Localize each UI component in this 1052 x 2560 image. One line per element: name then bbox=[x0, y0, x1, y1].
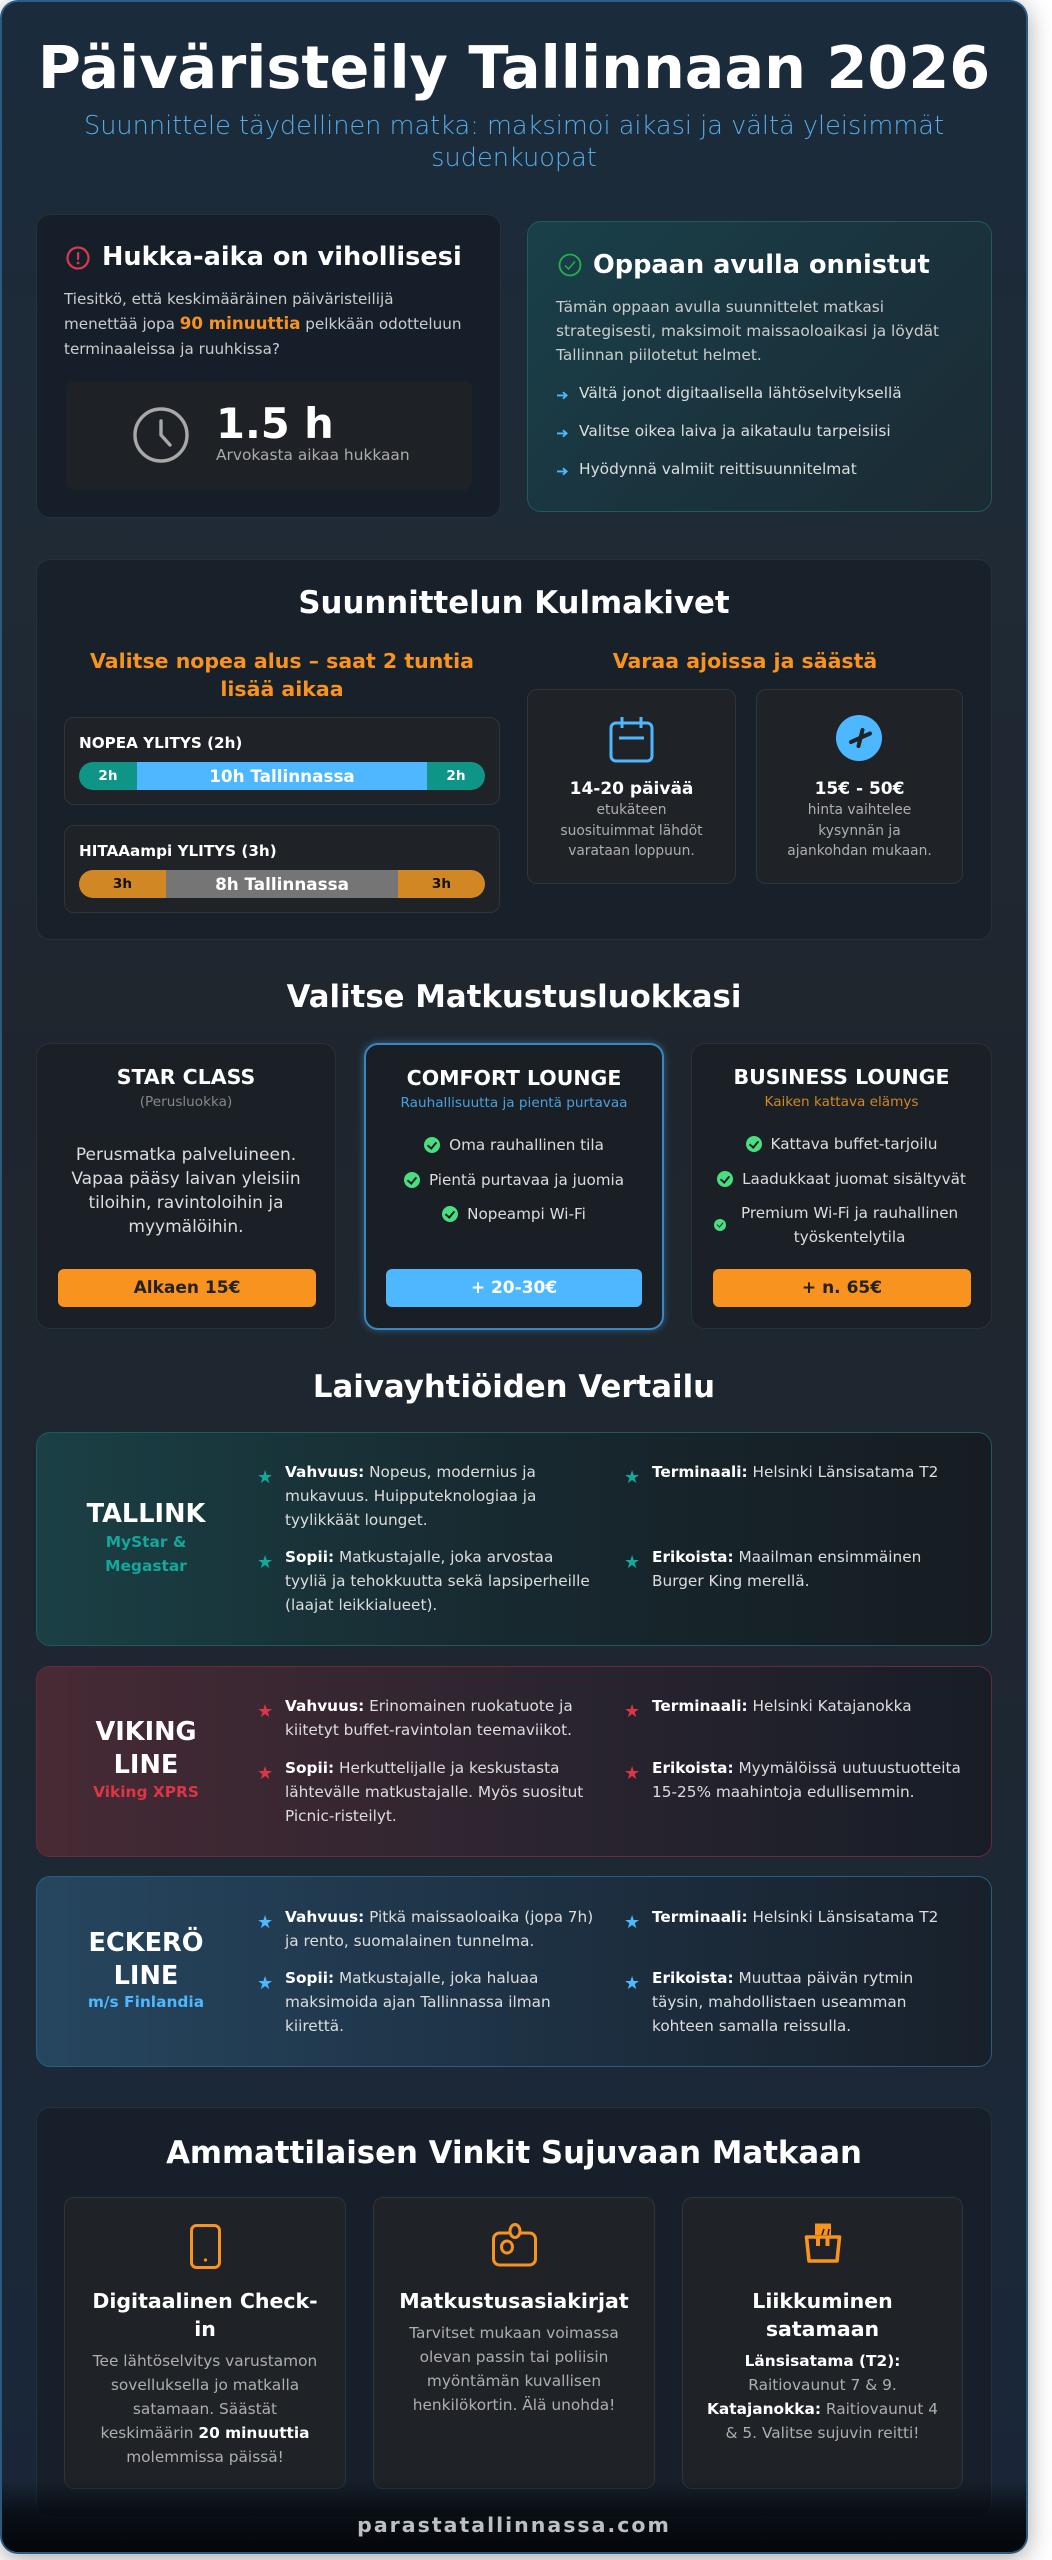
price button bbox=[713, 1269, 971, 1307]
stat box bbox=[66, 381, 472, 490]
special: Eckerö: täysin, mahdollistaen useamman bbox=[652, 1993, 906, 2011]
description bbox=[683, 2349, 962, 2445]
card: travel documents bbox=[373, 2197, 655, 2489]
star: ★ bbox=[257, 1701, 273, 1722]
card: booking time bbox=[527, 689, 736, 884]
price button: Alkaen 15€ bbox=[134, 1278, 240, 1298]
body text: Tiesitkö, että keskimääräinen päiväristeilijä bbox=[64, 290, 394, 308]
title: Matkustusasiakirjat bbox=[399, 2289, 629, 2313]
icon: check bbox=[558, 254, 582, 276]
icon: arrow bbox=[557, 430, 568, 438]
strength: Tallink: mukavuus. Huipputeknologiaa ja bbox=[285, 1487, 536, 1505]
title bbox=[65, 2288, 345, 2343]
ships: Viking Line: Viking XPRS bbox=[93, 1783, 199, 1801]
ships: Eckerö Line: m/s Finlandia bbox=[88, 1993, 204, 2011]
heading: Hukka-aika on vihollisesi bbox=[102, 242, 462, 272]
special: Eckerö: Erikoista: Muuttaa päivän rytmin bbox=[652, 1969, 913, 1987]
suited for: Viking: lähtevälle matkustajalle. Myös suositut bbox=[285, 1783, 583, 1801]
description: hinta vaihtelee bbox=[808, 802, 911, 818]
brand: Viking Line bbox=[95, 1717, 197, 1780]
icon: alert bbox=[66, 246, 90, 270]
class name: COMFORT LOUNGE bbox=[407, 1066, 621, 1090]
description: molemmissa päissä! bbox=[126, 2448, 284, 2466]
card: fast crossing bbox=[64, 717, 500, 805]
feature 2: Pientä purtavaa ja juomia bbox=[429, 1171, 624, 1189]
ships: Tallink: MyStar & bbox=[106, 1533, 186, 1551]
body text: strategisesti, maksimoit maissaoloaikasi ja löydät bbox=[556, 322, 939, 340]
star: ★ bbox=[624, 1552, 640, 1573]
description bbox=[71, 1145, 301, 1237]
special: Viking: Erikoista: Myymälöissä uutuustuotteita bbox=[652, 1759, 961, 1777]
strength: Eckerö: ja rento, suomalainen tunnelma. bbox=[285, 1932, 534, 1950]
description: keskimäärin 20 minuuttia bbox=[100, 2424, 310, 2442]
brand: Viking Line: VIKING bbox=[95, 1717, 197, 1747]
panel: wasted time bbox=[36, 214, 501, 518]
strength: Viking: Vahvuus: Erinomainen ruokatuote ja bbox=[285, 1697, 573, 1715]
class tagline: Rauhallisuutta ja pientä purtavaa bbox=[400, 1095, 628, 1111]
label: fast crossing: NOPEA YLITYS (2h) bbox=[79, 734, 242, 752]
description bbox=[65, 2349, 345, 2469]
card: star class bbox=[36, 1043, 336, 1329]
star: ★ bbox=[257, 1973, 273, 1994]
price button: + n. 65€ bbox=[802, 1278, 882, 1298]
brand: Eckerö Line: ECKERÖ bbox=[88, 1928, 204, 1958]
panel: planning cornerstones bbox=[36, 559, 992, 940]
subheading: fast vessel: lisää aikaa bbox=[220, 676, 344, 700]
value: 14-20 päivää bbox=[570, 779, 693, 799]
icon: phone bbox=[190, 2224, 221, 2269]
description bbox=[787, 802, 932, 859]
description: Katajanokka: Raitiovaunut 4 bbox=[707, 2400, 938, 2418]
ships: Tallink: Megastar bbox=[105, 1557, 187, 1575]
suited for: Eckerö: Sopii: Matkustajalle, joka haluaa bbox=[285, 1969, 538, 1987]
description: suosituimmat lähdöt bbox=[560, 822, 703, 838]
star: ★ bbox=[624, 1912, 640, 1933]
suited for: Viking: Picnic-risteilyt. bbox=[285, 1807, 397, 1825]
strength: Viking bbox=[285, 1697, 573, 1739]
star: ★ bbox=[624, 1467, 640, 1488]
star: ★ bbox=[257, 1763, 273, 1784]
description: sovelluksella jo matkalla bbox=[111, 2376, 299, 2394]
star: ★ bbox=[257, 1552, 273, 1573]
description: myöntämän kuvallisen bbox=[427, 2372, 601, 2390]
suited for: Eckerö: maksimoida ajan Tallinnassa ilman bbox=[285, 1993, 551, 2011]
body text: Tallinnan piilotetut helmet. bbox=[556, 346, 762, 364]
description: myymälöihin. bbox=[128, 1217, 244, 1237]
feature 3: Nopeampi Wi-Fi bbox=[467, 1205, 586, 1223]
description: tiloihin, ravintoloihin ja bbox=[88, 1193, 284, 1213]
benefit 3: Hyödynnä valmiit reittisuunnitelmat bbox=[579, 460, 857, 478]
subtitle bbox=[84, 111, 944, 173]
price button bbox=[58, 1269, 316, 1307]
title bbox=[683, 2288, 962, 2343]
feature 3: Premium Wi-Fi ja rauhallinen bbox=[741, 1204, 958, 1222]
footer band bbox=[0, 2480, 1028, 2554]
icon: plane bbox=[836, 715, 882, 761]
bar: fast crossing timeline: 2h bbox=[446, 768, 466, 784]
bar: fast crossing timeline: 10h Tallinnassa bbox=[209, 766, 355, 786]
benefit 2: Valitse oikea laiva ja aikataulu tarpeisiisi bbox=[579, 422, 891, 440]
suited for: Tallink: (laajat leikkialueet). bbox=[285, 1596, 437, 1614]
label: slow crossing: HITAAampi YLITYS (3h) bbox=[79, 842, 277, 860]
stat caption: Arvokasta aikaa hukkaan bbox=[216, 446, 410, 464]
price button: + 20-30€ bbox=[471, 1278, 557, 1298]
card: slow crossing bbox=[64, 825, 500, 913]
subtitle: Suunnittele täydellinen matka: maksimoi aikasi ja vältä yleisimmät bbox=[84, 111, 944, 141]
class tagline: Kaiken kattava elämys bbox=[765, 1094, 918, 1110]
icon: clock bbox=[133, 407, 189, 463]
subheading: fast vessel bbox=[90, 649, 474, 700]
icon: passport bbox=[492, 2223, 538, 2267]
strength: Viking: kiitetyt buffet-ravintolan teemaviikot. bbox=[285, 1721, 572, 1739]
bar: slow crossing timeline bbox=[79, 870, 485, 898]
description: etukäteen bbox=[596, 802, 666, 818]
star: ★ bbox=[624, 1763, 640, 1784]
panel: Tallink bbox=[36, 1432, 992, 1646]
bar: slow crossing timeline: 8h Tallinnassa bbox=[215, 874, 349, 894]
description: ajankohdan mukaan. bbox=[787, 843, 932, 859]
card: business lounge bbox=[691, 1043, 992, 1329]
card: price range bbox=[756, 689, 963, 884]
footer url: parastatallinnassa.com bbox=[357, 2513, 671, 2537]
description: & 5. Valitse sujuvin reitti! bbox=[726, 2424, 919, 2442]
terminal: Tallink: Terminaali: Helsinki Länsisatama T2 bbox=[652, 1463, 938, 1481]
title: Liikkuminen bbox=[752, 2289, 893, 2313]
subtitle: sudenkuopat bbox=[431, 143, 597, 173]
suited for: Tallink: tyyliä ja tehokkuutta sekä lapsiperheille bbox=[285, 1572, 590, 1590]
bar: fast crossing timeline bbox=[79, 762, 485, 790]
subheading: fast vessel: Valitse nopea alus – saat 2 tuntia bbox=[90, 649, 474, 673]
suited for: Viking bbox=[285, 1759, 583, 1825]
description: Vapaa pääsy laivan yleisiin bbox=[71, 1169, 301, 1189]
title: Päiväristeily Tallinnaan 2026 bbox=[38, 33, 990, 102]
description bbox=[374, 2321, 654, 2417]
body text: menettää jopa 90 minuuttia pelkkään odotteluun bbox=[64, 313, 461, 333]
icon: calendar bbox=[610, 717, 654, 762]
strength: Tallink: Vahvuus: Nopeus, modernius ja bbox=[285, 1463, 536, 1481]
feature 2: Laadukkaat juomat sisältyvät bbox=[742, 1170, 966, 1188]
panel: guide benefits bbox=[527, 221, 992, 512]
body text bbox=[556, 298, 939, 364]
class name: STAR CLASS bbox=[117, 1065, 255, 1089]
card: comfort lounge bbox=[364, 1043, 664, 1330]
special: Viking bbox=[652, 1759, 961, 1801]
feature 1: Oma rauhallinen tila bbox=[449, 1136, 604, 1154]
description: olevan passin tai poliisin bbox=[420, 2348, 608, 2366]
heading: cornerstones: Suunnittelun Kulmakivet bbox=[298, 585, 730, 621]
body text: terminaaleissa ja ruuhkissa? bbox=[64, 340, 280, 358]
brand: Eckerö Line bbox=[88, 1926, 204, 1990]
suited for: Eckerö bbox=[285, 1969, 551, 2035]
title: Digitaalinen Check- bbox=[92, 2289, 318, 2313]
brand: Tallink: TALLINK bbox=[87, 1499, 205, 1529]
suited for: Eckerö: kiirettä. bbox=[285, 2017, 344, 2035]
terminal: Viking: Terminaali: Helsinki Katajanokka bbox=[652, 1697, 912, 1715]
description: Raitiovaunut 7 & 9. bbox=[748, 2376, 897, 2394]
benefit 1: Vältä jonot digitaalisella lähtöselvityksellä bbox=[579, 384, 902, 402]
body text bbox=[64, 290, 461, 358]
description: Tarvitset mukaan voimassa bbox=[409, 2324, 619, 2342]
class tagline: (Perusluokka) bbox=[140, 1094, 232, 1110]
title: satamaan bbox=[766, 2316, 879, 2340]
panel: Viking Line bbox=[36, 1666, 992, 1857]
star: ★ bbox=[257, 1912, 273, 1933]
special: Tallink: Burger King merellä. bbox=[652, 1572, 809, 1590]
card: getting to harbour bbox=[682, 2197, 963, 2489]
price button bbox=[386, 1269, 642, 1307]
class name: BUSINESS LOUNGE bbox=[734, 1065, 949, 1089]
icon: arrow bbox=[557, 468, 568, 476]
bar: slow crossing timeline: 3h bbox=[113, 876, 132, 892]
description: Perusmatka palveluineen. bbox=[76, 1145, 296, 1165]
description: varataan loppuun. bbox=[568, 843, 695, 859]
stat value: 1.5 h bbox=[216, 399, 334, 448]
bar: slow crossing timeline: 3h bbox=[432, 876, 451, 892]
description bbox=[560, 802, 703, 859]
strength: Eckerö: Vahvuus: Pitkä maissaoloaika (jopa 7h) bbox=[285, 1908, 593, 1926]
subheading: book early: Varaa ajoissa ja säästä bbox=[613, 649, 877, 673]
star: ★ bbox=[257, 1467, 273, 1488]
heading: ferry companies: Laivayhtiöiden Vertailu bbox=[313, 1369, 715, 1405]
description: henkilökortin. Älä unohda! bbox=[413, 2396, 615, 2414]
panel: Eckerö Line bbox=[36, 1876, 992, 2067]
special: Tallink: Erikoista: Maailman ensimmäinen bbox=[652, 1548, 921, 1566]
suited for: Tallink: Sopii: Matkustajalle, joka arvostaa bbox=[285, 1548, 553, 1566]
feature 3 bbox=[714, 1204, 958, 1246]
icon: basket bbox=[805, 2223, 841, 2263]
icon: arrow bbox=[557, 392, 568, 400]
heading: travel class: Valitse Matkustusluokkasi bbox=[287, 979, 741, 1015]
heading: Oppaan avulla onnistut bbox=[593, 250, 930, 280]
ships: Tallink bbox=[105, 1533, 187, 1575]
value: 15€ - 50€ bbox=[815, 779, 904, 799]
special: Eckerö bbox=[652, 1966, 913, 2038]
body text: Tämän oppaan avulla suunnittelet matkasi bbox=[556, 298, 884, 316]
description: kysynnän ja bbox=[818, 822, 901, 838]
special: Viking: 15-25% maahintoja edullisemmin. bbox=[652, 1783, 915, 1801]
special: Eckerö: kohteen samalla reissulla. bbox=[652, 2017, 851, 2035]
special: Tallink bbox=[652, 1548, 921, 1590]
feature 1: Kattava buffet-tarjoilu bbox=[771, 1135, 937, 1153]
terminal: Eckerö: Terminaali: Helsinki Länsisatama T2 bbox=[652, 1908, 938, 1926]
bar: fast crossing timeline: 2h bbox=[98, 768, 118, 784]
description: Tee lähtöselvitys varustamon bbox=[93, 2352, 317, 2370]
description: satamaan. Säästät bbox=[133, 2400, 277, 2418]
strength: Eckerö bbox=[284, 1908, 593, 1950]
star: ★ bbox=[624, 1701, 640, 1722]
strength: Tallink: tyylikkäät lounget. bbox=[285, 1511, 428, 1529]
strength: Tallink bbox=[285, 1463, 536, 1529]
panel: pro tips bbox=[36, 2107, 992, 2518]
suited for: Tallink bbox=[285, 1548, 590, 1614]
title: in bbox=[194, 2316, 216, 2340]
suited for: Viking: Sopii: Herkuttelijalle ja keskustasta bbox=[285, 1759, 560, 1777]
brand: Eckerö Line: LINE bbox=[114, 1960, 178, 1990]
card: digital check-in bbox=[64, 2197, 346, 2489]
feature 3: työskentelytila bbox=[794, 1228, 905, 1246]
heading: pro tips: Ammattilaisen Vinkit Sujuvaan Matkaan bbox=[166, 2135, 862, 2171]
description: Länsisatama (T2): bbox=[745, 2352, 900, 2370]
star: ★ bbox=[624, 1973, 640, 1994]
brand: Viking Line: LINE bbox=[114, 1750, 178, 1780]
